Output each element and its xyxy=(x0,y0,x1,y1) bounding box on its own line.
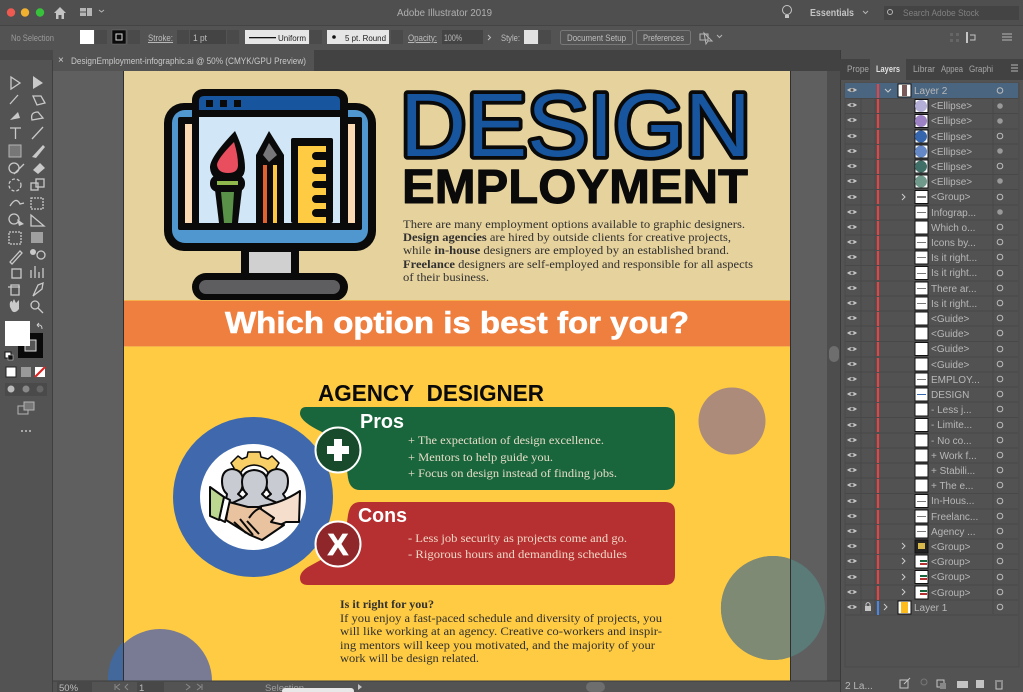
canvas area xyxy=(53,71,840,681)
layer rows: EMPLOY... xyxy=(931,375,980,386)
panel: control options bar: Uniform xyxy=(278,33,306,43)
layer rows: Freelanc... xyxy=(931,512,978,523)
fill and stroke swatches xyxy=(5,321,47,432)
decorative circle: bottom right xyxy=(721,556,825,660)
panel: control options bar: 5 pt. Round xyxy=(345,33,386,43)
layer 1 row xyxy=(847,601,1003,615)
layer rows: Agency ... xyxy=(931,527,975,538)
monitor base xyxy=(192,273,348,301)
panel: application title bar xyxy=(0,0,1023,25)
panel tabs: Graphi xyxy=(969,64,993,75)
panel: control options bar: 100% xyxy=(444,33,462,44)
layer rows: + Work f... xyxy=(931,451,977,462)
cons list: - Less job security as projects come and go. xyxy=(408,531,627,545)
layer rows: Which o... xyxy=(931,223,975,234)
tool icons xyxy=(8,76,45,313)
panel: layers xyxy=(840,50,1023,692)
layer rows: <Group> xyxy=(931,572,971,583)
layer rows: + Stabili... xyxy=(931,466,975,477)
layer rows: <Guide> xyxy=(931,314,970,325)
intro paragraph xyxy=(403,217,753,284)
layer rows xyxy=(847,99,1003,600)
decorative circle: top right xyxy=(698,388,766,454)
panel tabs: Appea xyxy=(941,64,964,75)
layer rows: <Ellipse> xyxy=(931,162,972,173)
panel: pros xyxy=(300,407,675,490)
layer rows: <Group> xyxy=(931,192,971,203)
layer rows: <Guide> xyxy=(931,344,970,355)
icon: ruler xyxy=(291,138,333,223)
intro paragraph: while in-house designers are employed by an established brand. xyxy=(403,243,729,257)
panel tabs xyxy=(847,64,993,75)
layer 2 row: Layer 2 xyxy=(914,86,948,97)
agency icon badge xyxy=(173,417,333,577)
layer rows: - Limite... xyxy=(931,420,972,431)
panel tabs: Prope xyxy=(847,64,869,75)
intro paragraph: Design agencies are hired by outside clients for creative projects, xyxy=(403,230,731,244)
layer rows: + The e... xyxy=(931,481,973,492)
banner: which option: Which option is best for you? xyxy=(225,305,689,340)
icon: plus badge xyxy=(316,428,360,472)
panel: control options bar: Stroke: xyxy=(148,33,173,44)
icon: paint brush xyxy=(210,131,245,223)
cons list xyxy=(408,531,627,561)
title: DESIGN: DESIGN xyxy=(400,76,751,176)
icon: pencil xyxy=(256,131,284,223)
infographic artboard xyxy=(108,71,825,681)
text block: is it right for you: ing mentors will keep you motivated, and the majority of your xyxy=(340,638,655,652)
panel: control options bar: 1 pt xyxy=(193,33,207,44)
layer rows: <Group> xyxy=(931,557,971,568)
layer rows: <Ellipse> xyxy=(931,101,972,112)
pros list: + Mentors to help guide you. xyxy=(408,450,553,464)
panel: application title bar: Essentials xyxy=(810,8,854,19)
panel tabs: Layers xyxy=(876,64,900,75)
panel: control options bar: Opacity: xyxy=(408,33,437,44)
layer rows: Is it right... xyxy=(931,299,977,310)
layer 2 row xyxy=(845,83,1018,98)
panel: cons xyxy=(300,502,675,585)
icon: x badge xyxy=(316,522,360,566)
yellow body background xyxy=(124,347,790,681)
panel: application title bar: Adobe Illustrator 2019 xyxy=(397,8,492,19)
layer rows: <Ellipse> xyxy=(931,116,972,127)
panel footer: 2 La... xyxy=(845,681,873,692)
artboard edges xyxy=(124,71,790,681)
panel: document tab: DesignEmployment-infographic.ai @ 50% (CMYK/GPU Preview) xyxy=(71,56,306,67)
intro paragraph: There are many employment options available to graphic designers. xyxy=(403,217,745,231)
panel: document tab: × xyxy=(58,55,64,66)
layer rows: <Group> xyxy=(931,588,971,599)
panel: control options bar: Style: xyxy=(501,33,520,44)
layer rows: <Group> xyxy=(931,542,971,553)
layer rows: <Guide> xyxy=(931,360,970,371)
panel: control options bar: Document Setup xyxy=(567,33,626,44)
layer rows: <Ellipse> xyxy=(931,132,972,143)
icon: x badge: X xyxy=(328,527,349,562)
header background xyxy=(124,71,790,300)
intro paragraph: of their business. xyxy=(403,270,489,284)
cons list: - Rigorous hours and demanding schedules xyxy=(408,547,627,561)
text block: is it right for you: If you enjoy a fast-paced schedule and diversity of projects, you xyxy=(340,611,662,625)
banner: which option xyxy=(124,300,790,347)
text block: is it right for you xyxy=(340,597,662,665)
canvas scroll bar xyxy=(827,71,840,681)
layer rows: - Less j... xyxy=(931,405,972,416)
icon: three people xyxy=(222,469,288,512)
text block: is it right for you: work will be design related. xyxy=(340,651,479,665)
panel: control options bar: No Selection xyxy=(11,33,54,44)
panel footer xyxy=(845,678,1003,692)
icon: handshake xyxy=(210,487,300,540)
panel: control options bar: Preferences xyxy=(643,33,684,44)
layer rows: <Ellipse> xyxy=(931,147,972,158)
layer rows: Is it right... xyxy=(931,253,977,264)
monitor stand xyxy=(241,250,299,276)
decorative circle: bottom left xyxy=(108,629,212,681)
panel: tools xyxy=(0,50,53,692)
pros list xyxy=(408,433,617,480)
pros list: + Focus on design instead of finding jobs. xyxy=(408,466,617,480)
layer rows: In-Hous... xyxy=(931,496,974,507)
layer rows: DESIGN xyxy=(931,390,969,401)
title: EMPLOYMENT: EMPLOYMENT xyxy=(402,161,748,214)
pros list: + The expectation of design excellence. xyxy=(408,433,604,447)
layer rows: - No co... xyxy=(931,436,972,447)
panel: status bar xyxy=(53,680,840,692)
layer rows: <Guide> xyxy=(931,329,970,340)
layer rows: <Ellipse> xyxy=(931,177,972,188)
intro paragraph: Freelance designers are self-employed and responsible for all aspects xyxy=(403,257,753,271)
layer 1 row: Layer 1 xyxy=(914,603,948,614)
layer rows: There ar... xyxy=(931,284,977,295)
panel tabs: Librar xyxy=(913,64,935,75)
text block: is it right for you: will like working at an agency. Creative co-workers and inspir- xyxy=(340,624,662,638)
pros label: Pros xyxy=(360,411,404,433)
icon: gear xyxy=(231,452,279,490)
layer rows: Infograp... xyxy=(931,208,976,219)
layer rows: Is it right... xyxy=(931,268,977,279)
panel: control options bar xyxy=(0,25,1023,50)
heading: agency designer: AGENCY DESIGNER xyxy=(318,380,544,406)
text block: is it right for you: Is it right for you? xyxy=(340,597,434,611)
panel: application title bar: Search Adobe Stock xyxy=(903,8,979,19)
icon: computer monitor with design tools xyxy=(164,89,376,301)
layer rows: Icons by... xyxy=(931,238,976,249)
cons label: Cons xyxy=(358,505,407,527)
panel: document tab xyxy=(0,50,1023,71)
